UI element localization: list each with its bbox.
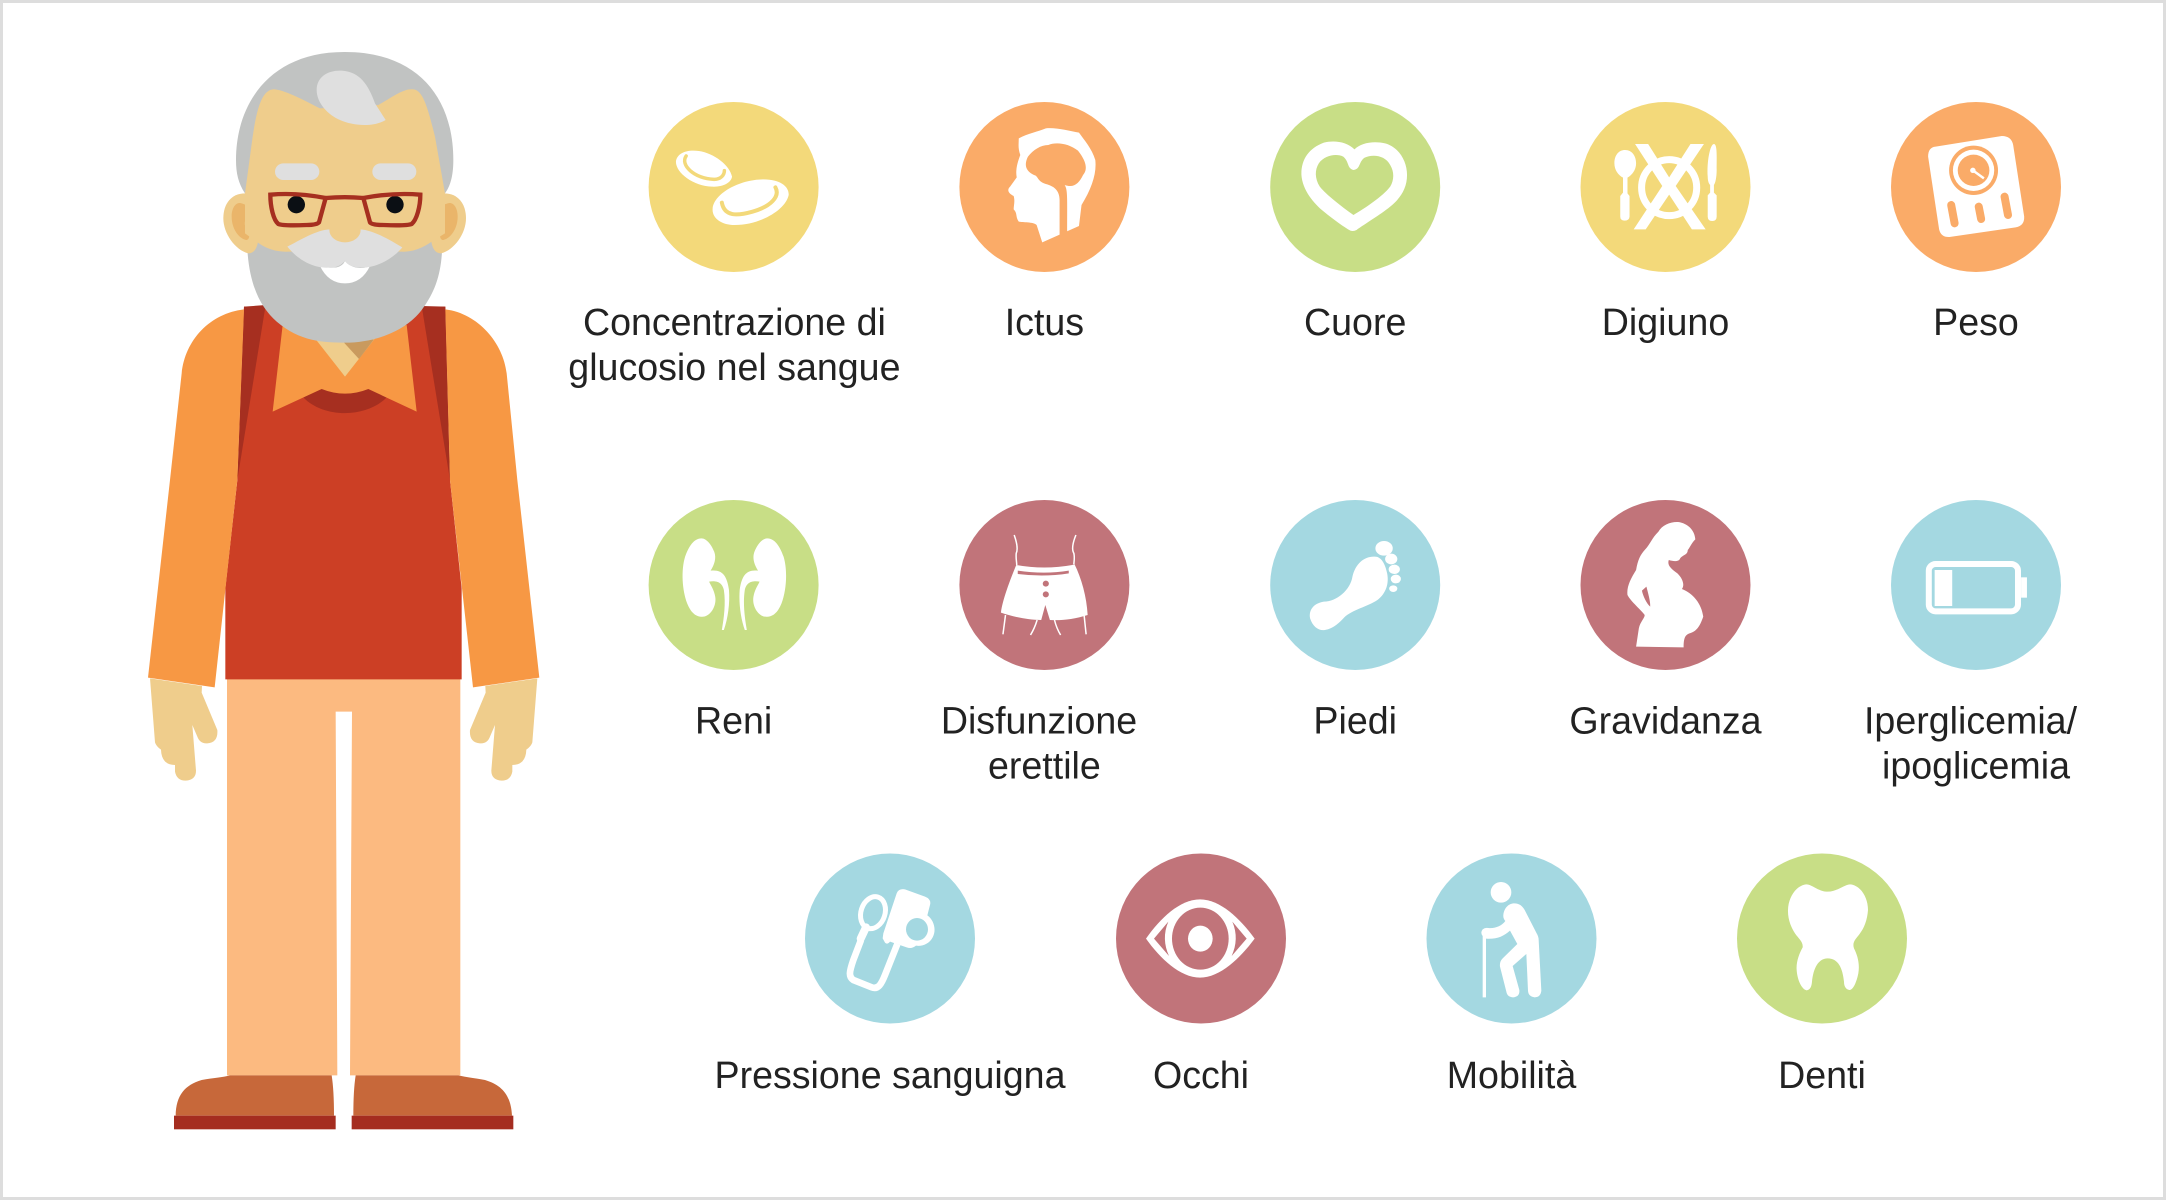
face: [245, 89, 445, 252]
item: Concentrazione di glucosio nel sangue: [568, 102, 900, 388]
moustache: [287, 229, 402, 268]
neck opening: [303, 388, 387, 413]
item: Peso: [1891, 102, 2061, 343]
label: Denti: [1778, 1054, 1866, 1096]
hair: [236, 52, 453, 193]
icon: blood pressure gauge: [805, 854, 975, 1024]
shirt collar: [273, 325, 417, 412]
icon: foot: [1270, 500, 1440, 670]
left ear: [223, 193, 258, 253]
icon: person with cane: [1426, 854, 1596, 1024]
label: Ictus: [1005, 301, 1084, 343]
icon: low battery: [1891, 500, 2061, 670]
vest straps: [237, 305, 450, 480]
icon: eye: [1116, 854, 1286, 1024]
right ear: [431, 193, 466, 253]
item: Pressione sanguigna: [715, 854, 1066, 1096]
eyes: [288, 196, 404, 213]
label: Piedi: [1313, 700, 1397, 742]
label: Occhi: [1153, 1054, 1249, 1096]
left shoe: [174, 1075, 336, 1129]
right hand: [470, 678, 537, 781]
label: Concentrazione di: [583, 301, 886, 343]
vest: [225, 307, 462, 679]
label: ipoglicemia: [1882, 744, 2070, 786]
item: Gravidanza: [1569, 500, 1762, 742]
label: Digiuno: [1602, 301, 1729, 343]
beard: [247, 240, 442, 343]
icon: weighing scale: [1891, 102, 2061, 272]
illustration: elderly man: [148, 52, 539, 1129]
left sleeve: [148, 309, 244, 687]
neck: [315, 338, 375, 377]
trousers: [227, 678, 460, 1075]
item: Ictus: [959, 102, 1129, 343]
forelock: [317, 71, 386, 125]
item: Occhi: [1116, 854, 1286, 1096]
icon: blood cells: [649, 102, 819, 272]
label: Pressione sanguigna: [715, 1054, 1066, 1096]
icon: pregnant woman: [1580, 500, 1750, 670]
label: glucosio nel sangue: [568, 346, 900, 388]
item: Denti: [1737, 854, 1907, 1096]
right sleeve: [445, 309, 539, 687]
item: Digiuno: [1580, 102, 1750, 343]
right shoe: [352, 1075, 513, 1129]
mouth: [320, 261, 370, 283]
icon: tooth: [1737, 854, 1907, 1024]
label: Iperglicemia/: [1864, 700, 2078, 742]
label: Disfunzione: [941, 700, 1137, 742]
icon: crossed plate and cutlery: [1580, 102, 1750, 272]
icon: kidneys: [649, 500, 819, 670]
item: Piedi: [1270, 500, 1440, 742]
icon: head with brain: [959, 102, 1129, 272]
label: Mobilità: [1447, 1054, 1576, 1096]
glasses: [270, 194, 420, 225]
item: Cuore: [1270, 102, 1440, 343]
label: Gravidanza: [1569, 700, 1762, 742]
item: Mobilità: [1426, 854, 1596, 1096]
label: erettile: [988, 744, 1101, 786]
nose: [329, 218, 361, 242]
eyebrows: [275, 163, 416, 180]
icon: boxer shorts: [959, 500, 1129, 670]
label: Cuore: [1304, 301, 1406, 343]
left hand: [150, 678, 217, 781]
label: Peso: [1933, 301, 2019, 343]
icon: heart: [1270, 102, 1440, 272]
label: Reni: [695, 700, 772, 742]
item: Reni: [649, 500, 819, 742]
item: Disfunzione erettile: [941, 500, 1137, 786]
item: Iperglicemia/ipoglicemia: [1864, 500, 2078, 786]
